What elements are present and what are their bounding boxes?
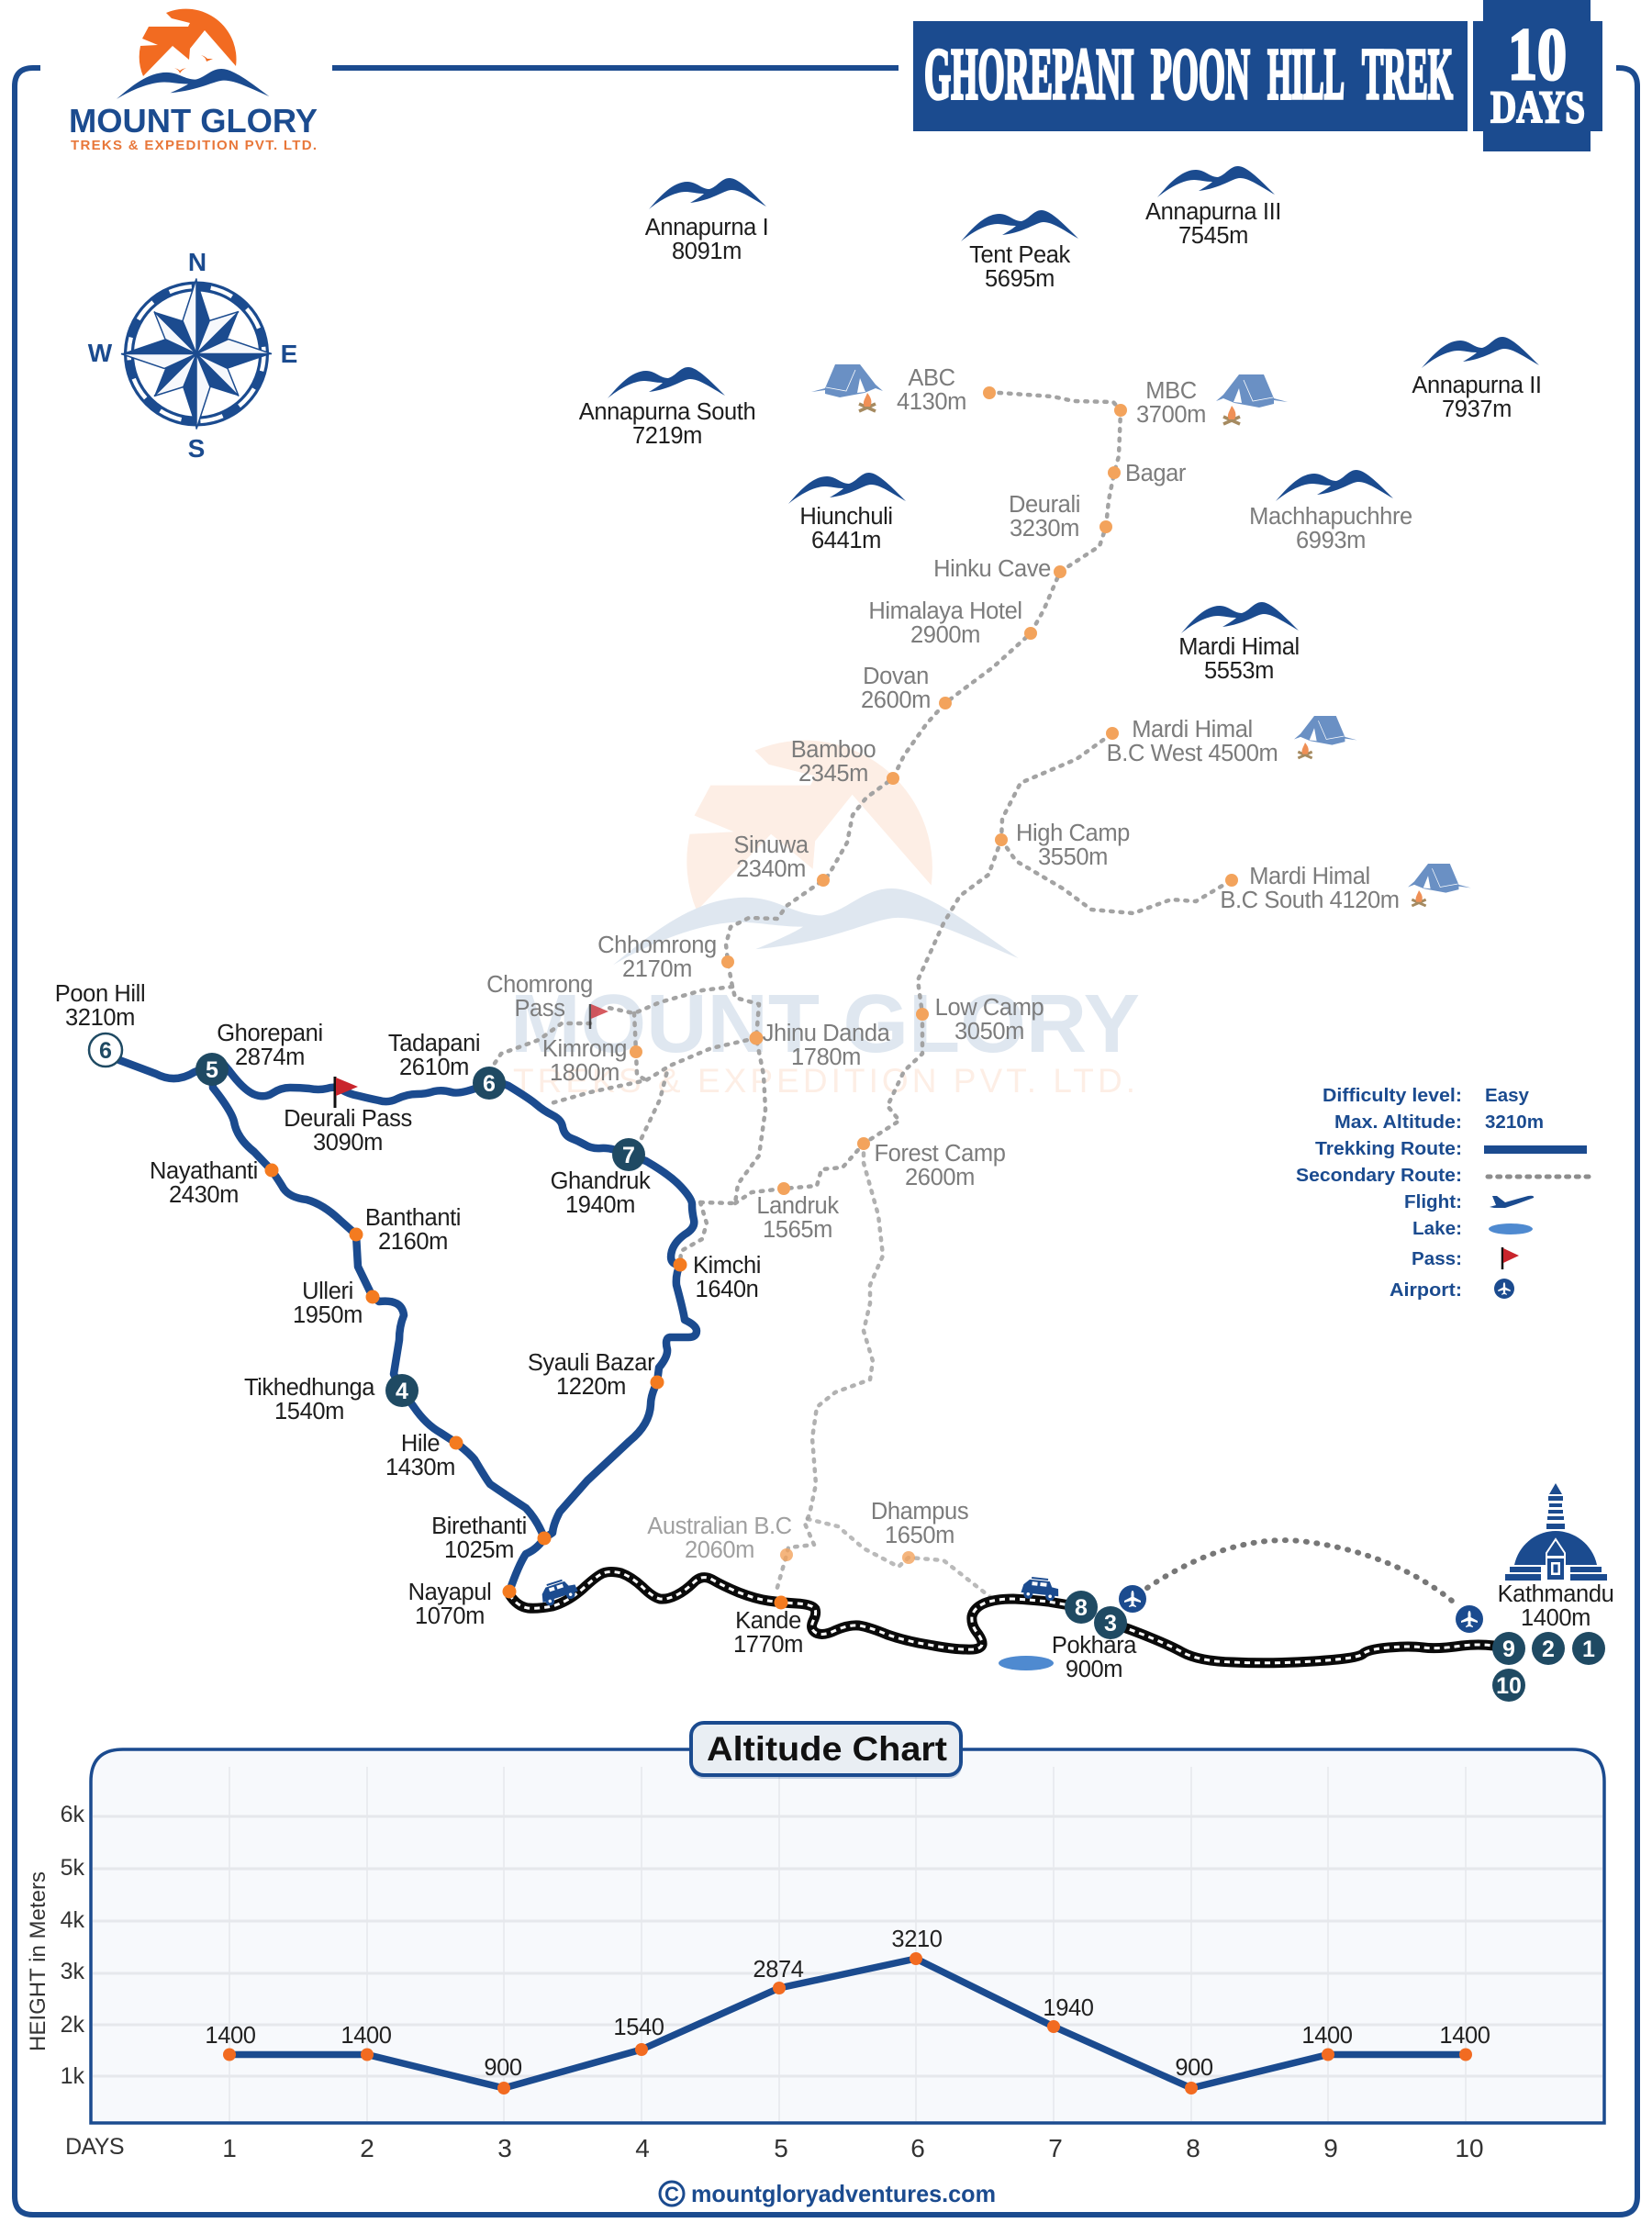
label: High Camp: High Camp	[1016, 821, 1130, 846]
legend: secondary route: Secondary Route:	[1296, 1166, 1462, 1186]
label: Poon Hill: Poon Hill	[55, 981, 145, 1007]
day marker 4	[385, 1374, 419, 1407]
label: Nayapul: 1070m	[415, 1603, 485, 1629]
label: Bamboo: Bamboo	[791, 737, 876, 763]
logo: MOUNT GLORY	[69, 102, 318, 140]
airport: Kathmandu	[1456, 1605, 1483, 1633]
label: Landruk: Landruk	[756, 1193, 839, 1219]
title banner: GHOREPANI	[924, 35, 1134, 115]
title banner: TREK	[1362, 35, 1453, 115]
x axis labels: 5	[774, 2134, 788, 2162]
label: MBC: 3700m	[1136, 402, 1206, 428]
legend: max altitude	[1334, 1112, 1544, 1133]
day marker 6 Poon Hill: 6	[99, 1038, 112, 1064]
label: Jhinu Danda: 1780m	[791, 1044, 861, 1070]
label: Deurali Pass: 3090m	[313, 1130, 383, 1156]
x axis labels: 6	[910, 2134, 925, 2162]
icon: jeep Nayapul	[538, 1576, 580, 1608]
compass rose: E	[281, 340, 297, 368]
label: Pokhara: 900m	[1066, 1657, 1122, 1682]
label: Chhomrong: Chhomrong	[597, 933, 717, 958]
peak: Machhapuchhre	[1249, 470, 1412, 553]
secondary routes	[492, 393, 1232, 1597]
label: Pokhara: Pokhara	[1052, 1633, 1136, 1659]
label: Dhampus: Dhampus	[871, 1499, 968, 1525]
legend: max altitude: Max. Altitude:	[1334, 1112, 1462, 1133]
altitude values: 1400	[340, 2023, 392, 2049]
day marker 4: 4	[396, 1379, 408, 1404]
label: Ghandruk: Ghandruk	[551, 1168, 650, 1194]
legend: flight	[1404, 1192, 1534, 1212]
day marker 2	[1532, 1632, 1565, 1665]
peak: Annapurna II	[1412, 337, 1542, 422]
website credit: C	[664, 2183, 679, 2206]
altitude values: 1540	[613, 2015, 664, 2040]
label: Hile: Hile	[401, 1431, 440, 1457]
label: Forest Camp: 2600m	[905, 1165, 975, 1190]
label: Mardi Himal B.C West: B.C West 4500m	[1107, 741, 1278, 766]
x axis labels: 4	[635, 2134, 650, 2162]
label: Nayathanti: Nayathanti	[150, 1158, 258, 1184]
label: Himalaya Hotel: Himalaya Hotel	[868, 598, 1022, 624]
x axis labels: 7	[1048, 2134, 1063, 2162]
label: Hinku Cave: Hinku Cave	[933, 556, 1051, 582]
peak: Annapurna III: Annapurna III	[1145, 199, 1281, 225]
label: Tadapani: 2610m	[399, 1055, 469, 1080]
compass rose: S	[188, 434, 205, 463]
watermark: MOUNT GLORY	[510, 978, 1140, 1070]
peak: Annapurna II: 7937m	[1442, 397, 1512, 422]
day marker 10: 10	[1496, 1673, 1522, 1699]
label: Hile: 1430m	[385, 1455, 455, 1480]
label: Nayathanti: 2430m	[169, 1182, 239, 1208]
altitude values: 2874	[753, 1957, 804, 1983]
label: Tikhedhunga: 1540m	[274, 1399, 344, 1424]
day marker 6	[473, 1067, 506, 1100]
days badge: 10	[1508, 15, 1567, 95]
compass rose: W	[88, 339, 113, 367]
title banner	[913, 21, 1468, 131]
peak: Tent Peak	[961, 210, 1078, 292]
y axis ticks: 1k	[61, 2063, 84, 2089]
altitude values: 1400	[205, 2023, 256, 2049]
y axis ticks: 3k	[61, 1959, 84, 1984]
label: Syauli Bazar: 1220m	[556, 1374, 626, 1400]
legend: difficulty: Difficulty level:	[1323, 1086, 1462, 1106]
label: Mardi Himal B.C South: Mardi Himal	[1249, 864, 1370, 889]
peak: Mardi Himal: 5553m	[1204, 658, 1274, 684]
label: ABC: 4130m	[897, 389, 966, 415]
label: Kimchi: 1640n	[696, 1277, 758, 1302]
day marker 6: 6	[483, 1071, 496, 1097]
label: Sinuwa: Sinuwa	[733, 832, 809, 858]
label: Ghandruk: 1940m	[565, 1192, 635, 1218]
x axis labels: 2	[360, 2134, 374, 2162]
x axis labels: DAYS	[65, 2134, 124, 2160]
peak: Tent Peak: Tent Peak	[969, 242, 1070, 268]
label: High Camp: 3550m	[1038, 844, 1108, 870]
label: Bagar: Bagar	[1125, 461, 1187, 486]
icon: Kathmandu stupa	[1505, 1483, 1607, 1581]
altitude values	[205, 1927, 1490, 2081]
day marker 9: 9	[1502, 1637, 1515, 1662]
label: Landruk: 1565m	[763, 1217, 832, 1243]
label: Dhampus: 1650m	[885, 1523, 954, 1548]
label: Chomrong Pass: Chomrong	[486, 972, 593, 998]
label: Kimrong: Kimrong	[542, 1036, 627, 1062]
label: Chhomrong: 2170m	[622, 956, 692, 982]
y axis ticks: 4k	[61, 1907, 84, 1933]
day marker 6 Poon Hill	[89, 1033, 122, 1067]
label: Dovan: 2600m	[861, 687, 931, 713]
label: Kathmandu: Kathmandu	[1498, 1581, 1613, 1607]
flag: Deurali Pass	[335, 1077, 358, 1108]
peak: Mardi Himal: Mardi Himal	[1178, 634, 1300, 660]
road: Nayapul to Pokhara	[509, 1571, 1081, 1649]
y axis title: HEIGHT in Meters	[26, 1871, 50, 2051]
x axis labels: 8	[1186, 2134, 1200, 2162]
legend	[1296, 1086, 1589, 1301]
legend: airport: Airport:	[1390, 1280, 1462, 1301]
label: Mardi Himal B.C South: B.C South 4120m	[1220, 888, 1400, 913]
days badge: DAYS	[1490, 81, 1585, 132]
chart gridlines	[93, 1767, 1602, 2121]
day marker 1	[1572, 1632, 1605, 1665]
label: Forest Camp: Forest Camp	[875, 1141, 1005, 1167]
flight route arc	[1147, 1540, 1458, 1606]
peak: Annapurna South	[579, 367, 755, 449]
peak: Machhapuchhre: Machhapuchhre	[1249, 504, 1412, 530]
main stop dots	[264, 1164, 787, 1610]
peak: Annapurna I: 8091m	[672, 239, 742, 264]
label: Low Camp: Low Camp	[935, 995, 1044, 1021]
x axis labels: 10	[1455, 2134, 1484, 2162]
peak: Annapurna South: Annapurna South	[579, 399, 755, 425]
label: Nayapul: Nayapul	[408, 1580, 491, 1605]
day marker 7	[612, 1138, 645, 1171]
icon: jeep Pokhara	[1021, 1576, 1060, 1602]
logo	[69, 9, 318, 153]
peak: Annapurna II: Annapurna II	[1412, 373, 1542, 398]
altitude values: 3210	[891, 1927, 943, 1952]
label: Kande: Kande	[735, 1608, 801, 1634]
label: Chomrong Pass: Pass	[514, 996, 565, 1022]
label: Birethanti: Birethanti	[431, 1514, 527, 1539]
label: Australian B.C: Australian B.C	[647, 1514, 792, 1539]
tent: Mardi Himal West	[1294, 716, 1357, 758]
label: Australian B.C: 2060m	[685, 1537, 754, 1563]
y axis ticks	[61, 1802, 84, 2089]
label: Jhinu Danda: Jhinu Danda	[763, 1021, 889, 1046]
tent: MBC	[1216, 374, 1288, 424]
legend: difficulty: Easy	[1485, 1086, 1530, 1106]
tent: Mardi Himal South	[1408, 864, 1471, 906]
compass rose	[88, 248, 297, 463]
peak: Annapurna I	[645, 178, 768, 264]
label: MBC: MBC	[1145, 378, 1197, 404]
altitude values: 1940	[1043, 1995, 1094, 2021]
peak: Annapurna I: Annapurna I	[645, 215, 768, 240]
label: Deurali Pass: Deurali Pass	[284, 1106, 412, 1132]
altitude chart heading	[691, 1723, 962, 1779]
label: Dovan: Dovan	[863, 664, 929, 689]
label: Syauli Bazar: Syauli Bazar	[528, 1350, 654, 1376]
legend: lake	[1412, 1219, 1533, 1239]
day marker 10	[1492, 1669, 1525, 1702]
website credit: mountgloryadventures.com	[691, 2180, 996, 2207]
day marker 8	[1065, 1591, 1098, 1624]
label: Deurali: 3230m	[1010, 516, 1079, 542]
altitude values: 1400	[1439, 2023, 1490, 2049]
flag: Chomrong Pass	[590, 1004, 608, 1029]
day marker 7: 7	[622, 1143, 635, 1168]
legend: max altitude: 3210m	[1485, 1112, 1544, 1133]
legend: lake: Lake:	[1412, 1219, 1462, 1239]
legend: trekking route	[1315, 1139, 1587, 1159]
label: Himalaya Hotel: 2900m	[910, 622, 980, 648]
day marker 8: 8	[1075, 1595, 1088, 1621]
legend: pass: Pass:	[1412, 1249, 1462, 1269]
label: Kimchi: Kimchi	[693, 1253, 761, 1279]
legend: flight: Flight:	[1404, 1192, 1462, 1212]
x axis labels: 1	[222, 2134, 237, 2162]
day marker 5: 5	[206, 1057, 218, 1083]
watermark	[510, 741, 1140, 1100]
legend: airport	[1390, 1279, 1514, 1301]
label: Banthanti: 2160m	[378, 1229, 448, 1255]
label: Low Camp: 3050m	[954, 1019, 1024, 1044]
label: Banthanti: Banthanti	[365, 1205, 461, 1231]
label: Ulleri: 1950m	[293, 1302, 363, 1328]
tent: ABC	[811, 364, 883, 411]
x axis labels	[65, 2134, 1484, 2162]
airport: Pokhara	[1119, 1585, 1146, 1613]
label: Ghorepani: Ghorepani	[217, 1021, 323, 1046]
day marker 9	[1492, 1632, 1525, 1665]
y axis ticks: 5k	[61, 1855, 84, 1881]
altitude points	[223, 1952, 1472, 2095]
day marker 1: 1	[1582, 1637, 1595, 1662]
peak: Tent Peak: 5695m	[985, 266, 1055, 292]
y axis ticks: 2k	[61, 2012, 84, 2038]
logo: TREKS & EXPEDITION PVT. LTD.	[71, 138, 317, 153]
label: Tikhedhunga: Tikhedhunga	[244, 1375, 374, 1401]
x axis labels: 3	[497, 2134, 512, 2162]
label: ABC: ABC	[908, 365, 955, 391]
compass rose: N	[188, 248, 206, 276]
peak: Annapurna III	[1145, 166, 1281, 249]
label: Poon Hill: 3210m	[65, 1005, 135, 1031]
label: Mardi Himal B.C West: Mardi Himal	[1132, 717, 1253, 743]
title banner: HILL	[1267, 35, 1345, 115]
legend: pass	[1412, 1247, 1519, 1269]
y axis ticks: 6k	[61, 1802, 84, 1827]
day marker 3	[1094, 1606, 1127, 1639]
day marker 5	[195, 1053, 229, 1086]
label: Ghorepani: 2874m	[235, 1044, 305, 1070]
label: Tadapani: Tadapani	[388, 1031, 480, 1056]
day marker 2: 2	[1542, 1637, 1555, 1662]
legend: difficulty	[1323, 1086, 1530, 1106]
altitude values: 1400	[1301, 2023, 1353, 2049]
peak: Mardi Himal	[1178, 602, 1300, 684]
label: Kimrong: 1800m	[550, 1060, 620, 1086]
label: Kathmandu: 1400m	[1521, 1605, 1591, 1631]
altitude values: 900	[484, 2055, 522, 2081]
road: Pokhara to Kathmandu	[1111, 1623, 1509, 1663]
legend: trekking route: Trekking Route:	[1315, 1139, 1462, 1159]
x axis labels: 9	[1323, 2134, 1338, 2162]
altitude chart heading: Altitude Chart	[707, 1730, 947, 1768]
peak: Hiunchuli: Hiunchuli	[799, 504, 893, 530]
label: Deurali: Deurali	[1009, 492, 1080, 518]
peak: Hiunchuli: 6441m	[811, 528, 881, 553]
peak: Machhapuchhre: 6993m	[1296, 528, 1366, 553]
label: Kande: 1770m	[733, 1632, 803, 1658]
label: Sinuwa: 2340m	[736, 856, 806, 882]
secondary stop dots	[630, 386, 1238, 1564]
icon: lake Phewa	[999, 1656, 1054, 1670]
day marker 3: 3	[1104, 1611, 1117, 1637]
main trekking route	[119, 1060, 697, 1592]
label: Ulleri: Ulleri	[302, 1279, 353, 1304]
peak: Annapurna South: 7219m	[632, 423, 702, 449]
title banner: POON	[1151, 35, 1250, 115]
altitude line	[229, 1959, 1466, 2088]
peak: Annapurna III: 7545m	[1178, 223, 1248, 249]
altitude chart panel	[26, 1749, 1604, 2162]
watermark: TREKS & EXPEDITION PVT. LTD.	[513, 1062, 1135, 1100]
peak: Hiunchuli	[788, 473, 906, 553]
label: Bamboo: 2345m	[798, 761, 868, 787]
days badge	[1473, 0, 1602, 151]
label: Birethanti: 1025m	[444, 1537, 514, 1563]
altitude values: 900	[1175, 2055, 1213, 2081]
